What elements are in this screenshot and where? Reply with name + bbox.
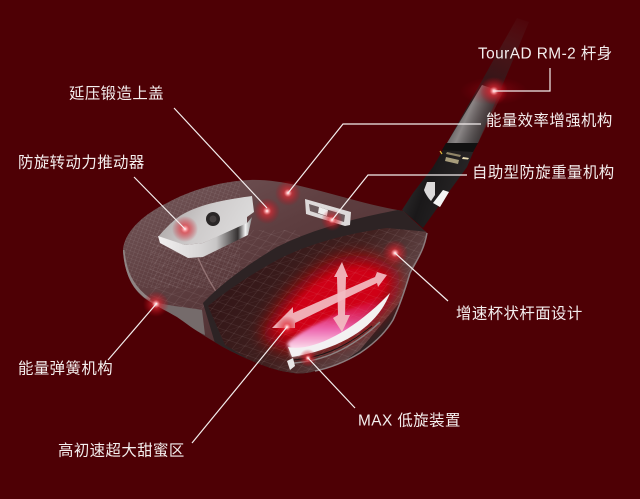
leader lines [108,68,550,443]
crown wireframe mesh [123,181,300,310]
label: forged upper cover: 延压锻造上盖 [69,84,164,102]
label: shaft: TourAD RM-2 杆身 [478,44,613,62]
label: cup face design: 增速杯状杆面设计 [456,304,583,322]
label: high launch sweet spot: 高初速超大甜蜜区 [58,442,185,460]
left momentum plate [158,196,254,258]
highlight: energy mechanism [275,180,301,206]
spin weight [305,199,351,226]
shaft [447,18,529,143]
face wireframe mesh [208,228,430,378]
highlight: upper cover [254,198,280,224]
label: MAX low spin device: MAX 低旋装置 [358,412,461,430]
face rim [315,233,427,371]
label: energy spring mechanism: 能量弹簧机构 [18,360,113,378]
highlight: momentum plate [172,216,198,242]
label: energy efficiency mechanism: 能量效率增强机构 [486,112,613,130]
club head body [123,180,427,373]
highlight: anti-spin weight [321,209,343,231]
label: anti-spin weight: 自助型防旋重量机构 [472,164,615,182]
highlight: cup face [382,240,408,266]
golf driver illustration [120,18,529,385]
label: anti-spin momentum thruster: 防旋转动力推动器 [18,154,145,172]
energy arrows [272,262,387,332]
glow halo behind shaft highlight [460,77,528,105]
highlight: low spin device [299,349,317,367]
highlight: spring mechanism [143,291,169,317]
highlight: shaft [480,77,508,105]
red sweet spot glow [262,256,399,350]
highlight: sweet spot [276,316,298,338]
hosel with gold bands [402,143,478,228]
lower skirt [143,297,205,335]
crown band and face [203,209,432,385]
low spin weight [287,358,295,370]
pink gradient and white sole strip [287,293,390,363]
